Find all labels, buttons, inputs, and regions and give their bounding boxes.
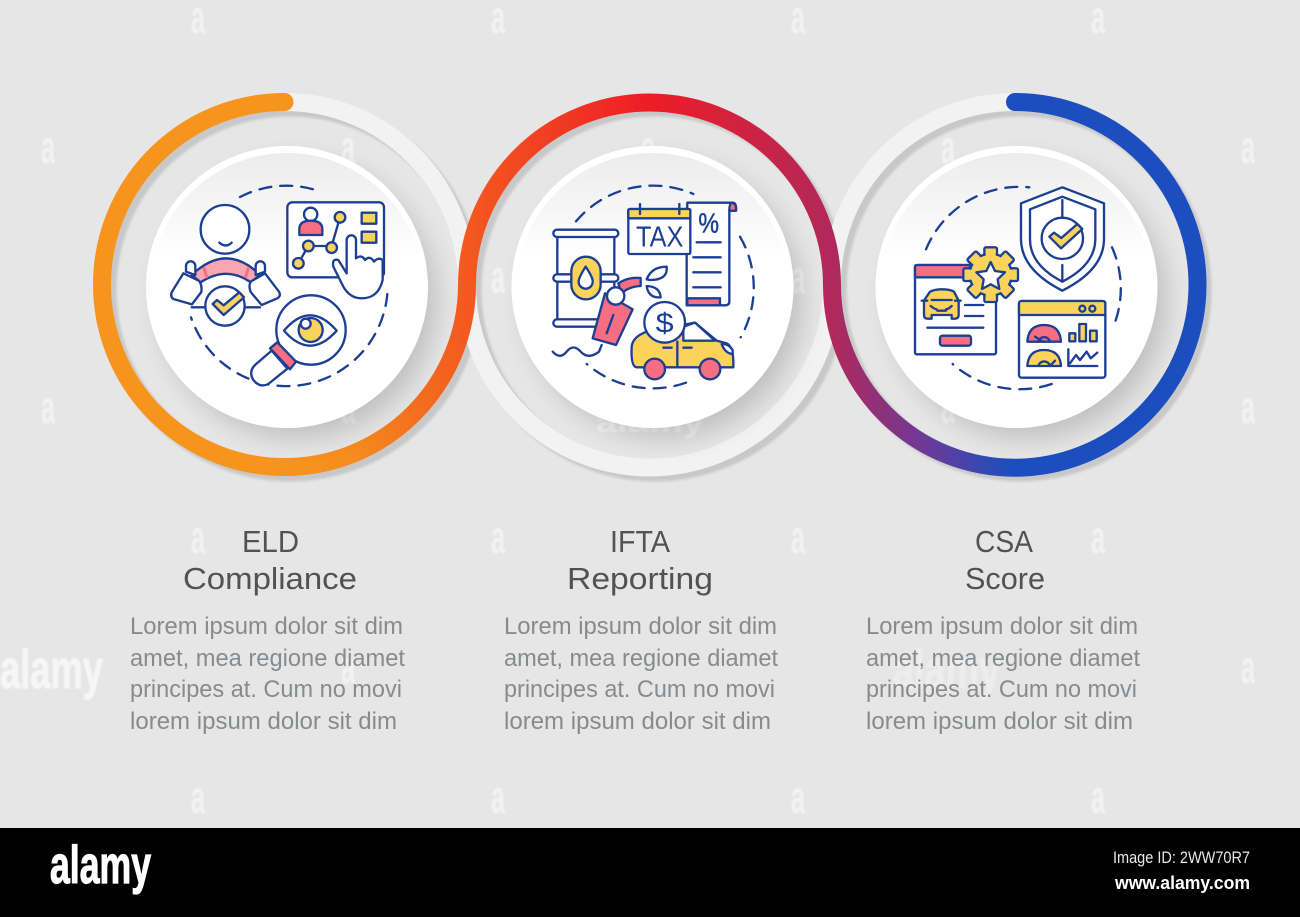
icon: shield, gear and dashboard windows [915, 187, 1121, 389]
heading: ELD Compliance: ELD [242, 524, 299, 559]
text block: ELD Compliance: Lorem ipsum dolor sit dim [130, 613, 403, 640]
watermark letters: a [41, 381, 55, 433]
watermark letters: a [1241, 641, 1255, 693]
footer bar [0, 828, 1300, 917]
heading: ELD Compliance: Compliance [183, 561, 357, 596]
text block: IFTA Reporting: lorem ipsum dolor sit dim [504, 708, 771, 735]
watermark letters: a [191, 771, 205, 823]
text block: ELD Compliance: principes at. Cum no movi [130, 676, 402, 703]
icon: barrel, tax calendar, nozzle and car [553, 186, 754, 388]
text block: CSA Score: amet, mea regione diamet [866, 645, 1140, 672]
watermark letters: a [941, 381, 955, 433]
heading: IFTA Reporting [567, 524, 713, 596]
disk 2 [512, 146, 794, 428]
icon: barrel, tax calendar, nozzle and car: % [698, 207, 719, 238]
watermark words: alamy [0, 638, 103, 700]
text block: IFTA Reporting: Lorem ipsum dolor sit dim [504, 613, 777, 640]
footer url: www.alamy.com [1114, 873, 1250, 893]
text block: CSA Score: lorem ipsum dolor sit dim [866, 708, 1133, 735]
image id: Image ID: 2WW70R7 [1113, 848, 1250, 867]
disk 1 [146, 146, 428, 428]
watermark words [0, 406, 1000, 700]
ring shadows [108, 108, 1202, 472]
watermark letters: a [1091, 251, 1105, 303]
watermark letters: a [491, 251, 505, 303]
light ring segments [284, 102, 1015, 468]
gradient flowing line [102, 102, 1198, 468]
watermark letters: a [341, 381, 355, 433]
watermark letters: a [41, 121, 55, 173]
watermark letters: a [941, 121, 955, 173]
watermark letters: a [191, 511, 205, 563]
text block: ELD Compliance [130, 613, 405, 735]
watermark letters: a [341, 641, 355, 693]
text block: CSA Score: Lorem ipsum dolor sit dim [866, 613, 1138, 640]
watermark letters: a [341, 121, 355, 173]
heading: IFTA Reporting: IFTA [610, 524, 670, 559]
text block: IFTA Reporting [504, 613, 778, 735]
watermark letters: a [491, 511, 505, 563]
watermark letters: a [491, 771, 505, 823]
text block: IFTA Reporting: amet, mea regione diamet [504, 645, 778, 672]
heading: CSA Score [965, 524, 1045, 596]
heading: IFTA Reporting: Reporting [567, 561, 713, 596]
watermark letters: a [791, 511, 805, 563]
heading: ELD Compliance [183, 524, 357, 596]
watermark letters: a [791, 251, 805, 303]
text block: CSA Score: principes at. Cum no movi [866, 676, 1137, 703]
footer logo: alamy [50, 836, 151, 895]
heading: CSA Score: Score [965, 561, 1045, 596]
watermark letters: a [1241, 121, 1255, 173]
text block: CSA Score [866, 613, 1140, 735]
text block: ELD Compliance: lorem ipsum dolor sit dim [130, 708, 397, 735]
icon: barrel, tax calendar, nozzle and car: $ [656, 307, 674, 338]
disk 3 [876, 146, 1158, 428]
watermark letters: a [791, 771, 805, 823]
watermark words: alamy [596, 406, 704, 439]
icon: barrel, tax calendar, nozzle and car: TAX [636, 222, 683, 254]
text block: IFTA Reporting: principes at. Cum no movi [504, 676, 775, 703]
heading: CSA Score: CSA [975, 524, 1033, 559]
watermark letters: a [1091, 771, 1105, 823]
disk shadows [160, 162, 1166, 438]
watermark words: alamy [893, 638, 1000, 700]
text block: ELD Compliance: amet, mea regione diamet [130, 645, 405, 672]
watermark letters: a [641, 121, 655, 173]
watermark letters: a [1091, 511, 1105, 563]
watermark letters: a [1241, 381, 1255, 433]
icon: driver, route board and magnifier [171, 186, 387, 386]
